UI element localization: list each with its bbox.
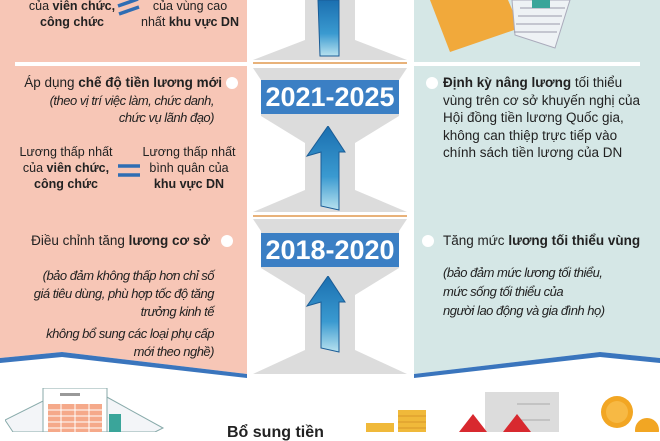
icon: tilted equals top [118, 0, 140, 16]
comparison block mid [19, 145, 236, 191]
left term: công chức [34, 177, 98, 191]
icon: coin stacks [366, 410, 426, 432]
right mid text: vùng trên cơ sở khuyến nghị của [443, 92, 640, 108]
left term: Lương thấp nhất [19, 145, 113, 159]
right bottom heading: Tăng mức lương tối thiểu vùng [443, 233, 640, 248]
equals [118, 164, 140, 177]
right term [142, 145, 236, 191]
right term: khu vực DN [154, 177, 224, 191]
bullet [221, 235, 233, 247]
italic note: (theo vị trí việc làm, chức danh, [50, 93, 214, 108]
right mid text: không can thiệp trực tiếp vào [443, 128, 617, 142]
italic note: chức vụ lãnh đạo) [119, 110, 214, 125]
italic note right bottom: mức sống tối thiểu của [443, 284, 563, 299]
italic note right bottom: người lao động và gia đình họ) [443, 303, 605, 318]
italic note left bottom: trưởng kinh tế [141, 304, 214, 319]
italic note right bottom [443, 265, 605, 318]
right mid text: Hội đồng tiền lương Quốc gia, [443, 110, 624, 125]
right term: Lương thấp nhất [142, 145, 236, 159]
text: Bổ sung tiền: Bổ sung tiền [227, 424, 324, 441]
top left text block [29, 0, 115, 29]
icon: folder and papers top right [430, 0, 570, 52]
right bottom bullet [422, 235, 434, 247]
arrow: top [318, 0, 340, 56]
italic note left bottom: giá tiêu dùng, phù hợp tốc độ tăng [34, 286, 214, 301]
italic note [50, 93, 214, 125]
right mid text [443, 75, 640, 160]
bullet [226, 77, 238, 89]
italic note left bottom: (bảo đảm không thấp hơn chỉ số [43, 268, 214, 283]
italic note left bottom: mới theo nghề) [134, 344, 214, 359]
top right-col text [141, 0, 239, 29]
arrow: 2021-2025 [306, 126, 346, 211]
right term: bình quân của [149, 161, 229, 175]
right mid text: Định kỳ nâng lương tối thiểu [443, 75, 622, 90]
left term: của viên chức, [23, 161, 109, 175]
icon: gold coins [601, 396, 659, 432]
top left text block: công chức [40, 15, 104, 29]
right mid bullet [426, 77, 438, 89]
icon: document with hearts [459, 392, 559, 432]
italic note right bottom: (bảo đảm mức lương tối thiểu, [443, 265, 602, 280]
top right-col text: nhất khu vực DN [141, 15, 239, 29]
left mid heading: Áp dụng chế độ tiền lương mới [24, 75, 222, 90]
year: 2018-2020: 2018-2020 [265, 235, 395, 265]
left term [19, 145, 113, 191]
italic note left bottom [34, 268, 216, 359]
arrow: 2018-2020 [306, 276, 346, 353]
italic note left bottom: không bổ sung các loại phụ cấp [46, 326, 214, 341]
left bottom heading: Điều chỉnh tăng lương cơ sở [31, 233, 210, 248]
year: 2021-2025: 2021-2025 [265, 82, 395, 112]
right mid text: chính sách tiền lương của DN [443, 145, 622, 160]
icon: papers bottom left [5, 388, 164, 432]
